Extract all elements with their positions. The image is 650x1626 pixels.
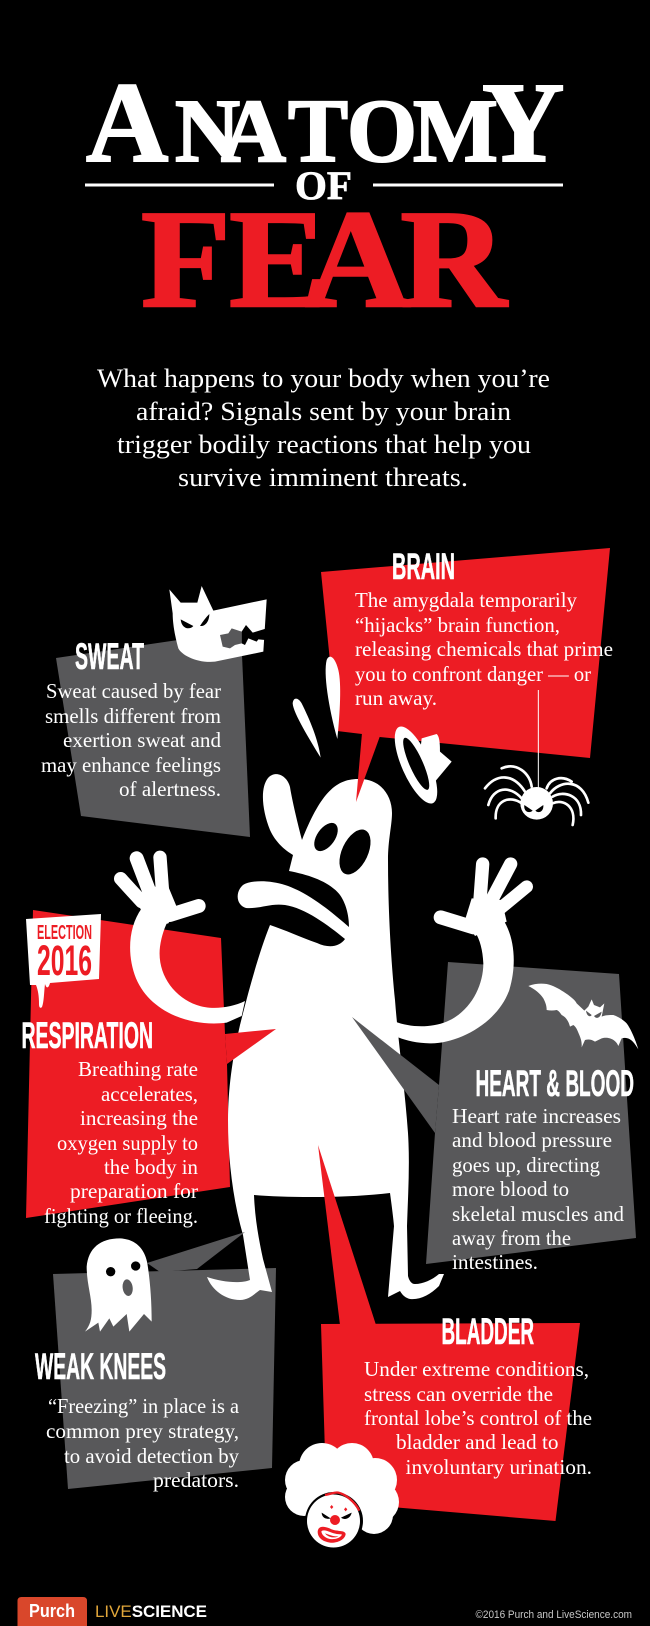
title line: Anatomy: A [86,59,168,186]
panel: weak knees background [53,1268,276,1489]
text block: respiration: fighting or fleeing. [44,1204,198,1228]
logo: purch [18,1597,87,1626]
text block: respiration: oxygen supply to [57,1131,198,1155]
text block: brain: The amygdala temporarily [355,588,577,612]
text block: respiration: preparation for [70,1179,198,1203]
text block: sweat: of alertness. [119,777,221,801]
text block: heart and blood: and blood pressure [452,1128,612,1152]
panel: respiration background [26,910,230,1218]
text block: heart and blood: away from the [452,1226,571,1250]
text block: bladder: stress can override the [364,1382,553,1406]
pointer: weak knees [147,1232,245,1272]
heading: sweat: SWEAT [75,636,144,677]
text block: sweat: may enhance feelings [41,753,221,777]
text block: brain: run away. [355,686,437,710]
text block: bladder: involuntary urination. [406,1455,592,1479]
text block: sweat: exertion sweat and [63,728,221,752]
text block: bladder: Under extreme conditions, [364,1357,589,1381]
text block: heart and blood: more blood to [452,1177,569,1201]
text block: sweat [41,636,221,801]
title [85,59,564,337]
text block: brain: you to confront danger — or [355,662,591,686]
text block: brain [355,546,613,710]
heading: respiration: RESPIRATION [22,1015,153,1056]
title line: Anatomy: Y [482,59,564,186]
text block: weak knees [35,1346,240,1492]
text block: bladder [364,1311,592,1479]
pointer: brain [356,733,380,802]
icon: ghost [85,1238,152,1332]
text block: bladder: bladder and lead to [396,1430,558,1454]
icon: wolf [169,586,267,662]
copyright: ©2016 Purch and LiveScience.com [476,1609,632,1621]
text block: weak knees: to avoid detection by [64,1444,239,1468]
intro text: afraid? Signals sent by your brain [136,396,511,426]
title rule left [85,184,274,186]
intro text [97,363,550,492]
badge: election 2016: ELECTION [37,921,92,944]
text block: heart and blood [452,1063,634,1274]
panel: sweat background [56,640,250,837]
text block: brain: releasing chemicals that prime [355,637,613,661]
text block: brain: “hijacks” brain function, [355,613,560,637]
text block: heart and blood: Heart rate increases [452,1104,621,1128]
title line: Anatomy: NATOM [175,82,498,181]
text block: respiration: increasing the [80,1106,198,1130]
title rule right [373,184,563,186]
figure eyes [309,819,377,879]
figure left arm and hand [121,857,245,1023]
sweat drops [293,657,340,758]
pointer: heart and blood [352,1017,439,1133]
intro text: trigger bodily reactions that help you [117,429,531,459]
icon: spider [485,690,588,825]
figure head and body [207,774,444,1300]
heading: brain: BRAIN [392,546,455,587]
footer logos [18,1597,207,1626]
text block: sweat: smells different from [45,704,221,728]
text block: respiration [22,1015,198,1228]
panel: brain background [321,548,610,758]
text block: sweat: Sweat caused by fear [46,679,221,703]
text block: respiration: Breathing rate [78,1057,198,1081]
logo: purch: Purch [29,1601,75,1621]
figure: screaming man [121,657,527,1300]
text block: bladder: frontal lobe’s control of the [364,1406,592,1430]
pointer: respiration [225,1029,276,1064]
icon: bat [528,984,638,1049]
text block: respiration: the body in [104,1155,198,1179]
intro text: survive imminent threats. [178,462,468,492]
heading: bladder: BLADDER [442,1311,534,1352]
panel: bladder background [321,1323,580,1521]
badge: election 2016: 2016 [37,937,92,985]
text block: heart and blood: skeletal muscles and [452,1202,624,1226]
text block: heart and blood: intestines. [452,1250,538,1274]
figure right arm and hand [395,864,527,1043]
heading: weak knees: WEAK KNEES [35,1346,166,1387]
logo: live science: LIVESCIENCE [95,1602,207,1621]
badge: election 2016 [26,914,101,1008]
text block: respiration: accelerates, [101,1082,198,1106]
title word: of: OF [295,163,352,208]
icon: hat [386,721,452,809]
clown face [305,1492,363,1550]
text block: weak knees: common prey strategy, [46,1419,239,1443]
clown hair [285,1443,399,1534]
pointer: bladder [318,1145,376,1325]
text block: heart and blood: goes up, directing [452,1153,600,1177]
icon: clown [285,1443,399,1550]
text block: weak knees: “Freezing” in place is a [48,1394,240,1418]
text block: weak knees: predators. [153,1468,239,1492]
panel: heart and blood background [426,962,636,1264]
title line: Fear: FEAR [141,182,508,337]
intro text: What happens to your body when you’re [97,363,550,393]
